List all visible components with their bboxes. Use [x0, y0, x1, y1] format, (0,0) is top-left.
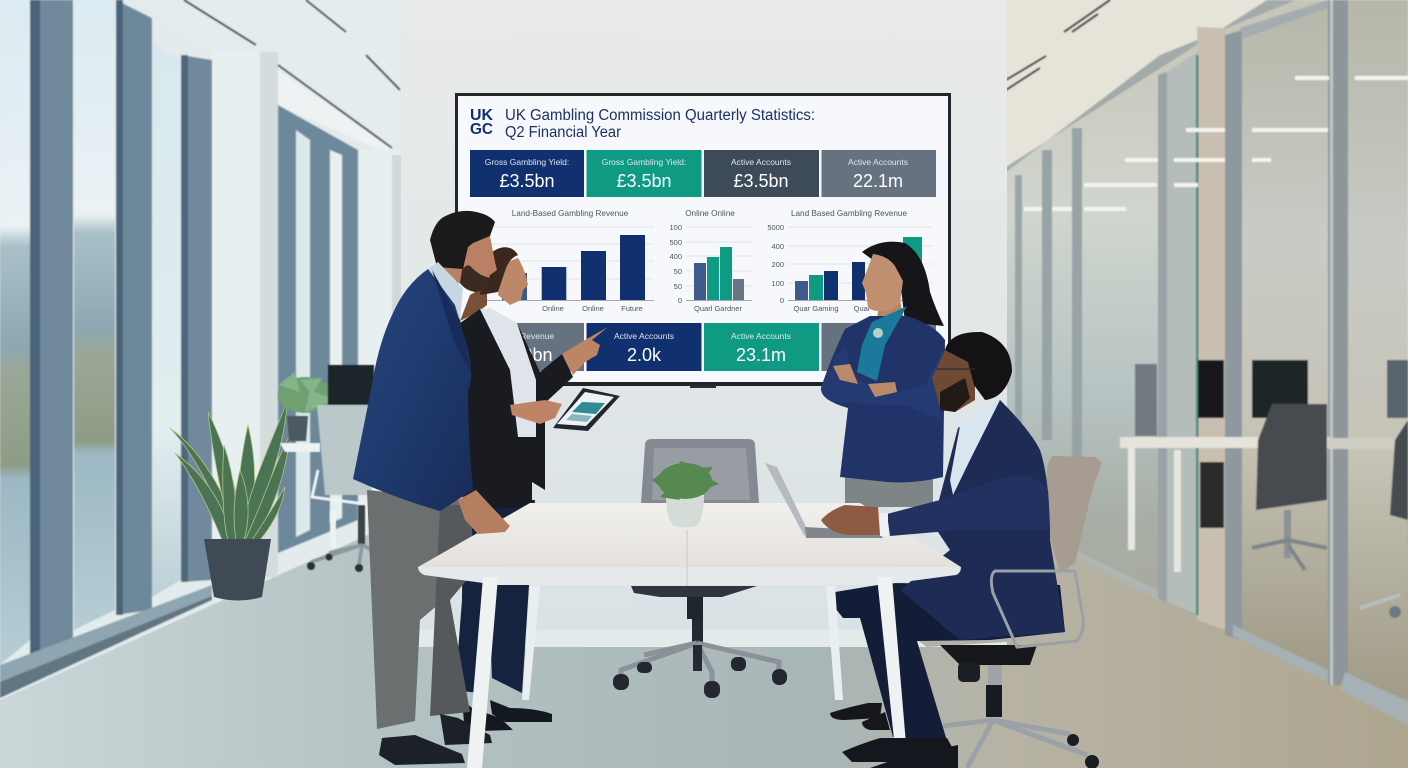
- floor: [0, 520, 1408, 768]
- shirt: [480, 308, 536, 437]
- background monitor and office chair: [307, 365, 376, 572]
- KPI row 1: £3.5bn: [616, 171, 672, 191]
- chart: online: 500: [669, 238, 682, 247]
- chart: land based gambling revenue 2: Land Based Gambling Revenue: [791, 209, 907, 218]
- tablet: [553, 388, 620, 431]
- KPI row 1: £3.5bn: [499, 171, 555, 191]
- logo: UKGC: [470, 107, 494, 138]
- left window wall: [0, 0, 401, 700]
- trousers: [845, 470, 933, 507]
- glasses: [936, 368, 975, 370]
- center back wall: [401, 0, 1007, 647]
- chart: land based gambling revenue 2: 5000: [767, 223, 784, 232]
- chart: land based gambling revenue 2: [767, 209, 932, 313]
- KPI row 1: [470, 150, 936, 197]
- ceiling lights reflected in glass: [1024, 76, 1408, 211]
- jacket: [460, 309, 573, 508]
- face: [498, 258, 528, 305]
- hair: [430, 211, 495, 269]
- hair: [945, 332, 1012, 400]
- chart: land-based gambling revenue: [470, 209, 654, 313]
- chart: land based gambling revenue 2: Quar Gaming: [793, 304, 839, 313]
- chart: land-based gambling revenue: Online: [542, 304, 564, 313]
- cuff: [880, 513, 888, 536]
- chart: land-based gambling revenue: Future: [621, 304, 643, 313]
- chart: online: 50: [674, 267, 682, 276]
- seated man head and arm: [821, 332, 1050, 536]
- standing man: [353, 211, 497, 729]
- table top: [418, 503, 961, 567]
- trousers: [367, 490, 472, 729]
- KPI row 1: 22.1m: [853, 171, 903, 191]
- jacket: [353, 269, 473, 511]
- long hair: [862, 242, 944, 326]
- dashboard title: [505, 107, 815, 141]
- presenting woman: [455, 247, 620, 693]
- KPI row 2: Active Accounts: [614, 331, 674, 341]
- background offices: [1198, 360, 1224, 418]
- chart: land-based gambling revenue: Online: [582, 304, 604, 313]
- chart: online: Online Online: [685, 209, 735, 218]
- chart: land based gambling revenue 2: 0: [780, 296, 784, 305]
- plant on table: [652, 461, 719, 528]
- seated man chair arm: [991, 571, 1083, 647]
- chart: land-based gambling revenue: Land-Based Gambling Revenue: [512, 209, 629, 218]
- KPI row 1: Active Accounts: [848, 157, 908, 167]
- standing man shoes: [379, 714, 492, 765]
- crossed arms: [821, 345, 945, 420]
- chart: online: 100: [669, 223, 682, 232]
- chart: online: Quarl Gardner: [694, 304, 742, 313]
- standing woman right shoes: [830, 703, 890, 730]
- hands: [821, 505, 880, 535]
- KPI row 2: [470, 323, 936, 371]
- right glass partition wall: [1006, 0, 1408, 725]
- trousers: [455, 500, 535, 693]
- chart: online: 0: [678, 296, 682, 305]
- chart: online: [669, 209, 752, 313]
- KPI row 1: £3.5bn: [733, 171, 789, 191]
- center chair base: [613, 586, 787, 698]
- standing man hand on table: [458, 490, 510, 534]
- back table legs: [522, 586, 540, 700]
- chart: online: 50: [674, 282, 682, 291]
- KPI row 2: Total Revenue: [500, 331, 554, 341]
- table: [418, 503, 961, 768]
- neck: [875, 300, 905, 330]
- front table legs: [467, 577, 498, 768]
- seated man chair: [910, 456, 1102, 768]
- hand on tablet: [510, 400, 562, 424]
- presenting woman shoes: [462, 700, 552, 731]
- KPI row 2: 23.1m: [736, 345, 786, 365]
- dashboard title: Q2 Financial Year: [505, 124, 621, 141]
- arm: [887, 476, 1050, 536]
- face: [862, 254, 903, 311]
- face: [932, 350, 975, 412]
- KPI row 2: £1.9bn: [497, 345, 553, 365]
- logo: UKGC: UK: [470, 107, 494, 124]
- pointing hand: [562, 327, 608, 375]
- chart: land based gambling revenue 2: 400: [771, 242, 784, 251]
- wall-mounted screen dashboard: [455, 93, 951, 388]
- dashboard title: UK Gambling Commission Quarterly Statistics:: [505, 107, 815, 124]
- logo: UKGC: GC: [470, 121, 493, 138]
- seated man shoes: [842, 738, 958, 768]
- background plant on desk: [278, 372, 335, 452]
- chart: land based gambling revenue 2: 100: [771, 279, 784, 288]
- laptop: [765, 463, 883, 538]
- KPI row 2: 2.0k: [627, 345, 662, 365]
- hair: [480, 247, 518, 295]
- KPI row 1: Gross Gambling Yield:: [485, 157, 569, 167]
- KPI row 1: Gross Gambling Yield:: [602, 157, 686, 167]
- seated man trousers: [832, 583, 1065, 741]
- face: [440, 236, 497, 292]
- neck and shirt collar: [428, 262, 463, 320]
- chart: online: 400: [669, 252, 682, 261]
- KPI row 1: Active Accounts: [731, 157, 791, 167]
- left snake plant in pot: [170, 402, 290, 600]
- beard: [940, 378, 970, 412]
- KPI row 2: Active Accounts: [731, 331, 791, 341]
- hands: [833, 364, 897, 397]
- beard: [460, 265, 490, 292]
- jacket: [821, 316, 945, 482]
- scarf: [857, 306, 907, 381]
- center empty chair back: [641, 439, 759, 503]
- ponytail: [460, 285, 487, 321]
- seated man torso: [900, 400, 1065, 640]
- chart: land based gambling revenue 2: 200: [771, 260, 784, 269]
- chart: land based gambling revenue 2: Quar: [854, 304, 871, 313]
- standing woman right: [821, 242, 945, 507]
